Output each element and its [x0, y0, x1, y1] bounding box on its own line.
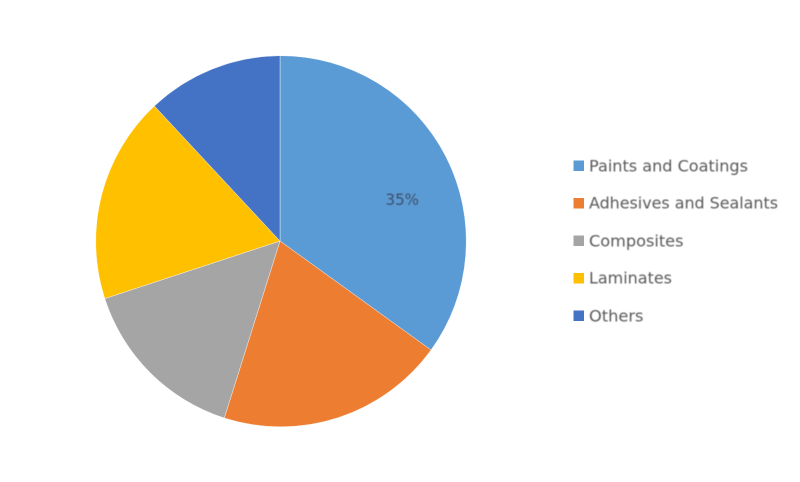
legend item: Others: Others: [589, 306, 644, 326]
legend item: Adhesives and Sealants: Adhesives and Sealants: [589, 194, 778, 212]
slice: Others: [154, 56, 280, 241]
legend: [574, 156, 778, 326]
slice: Laminates: [96, 106, 280, 299]
legend item: Laminates: Laminates: [589, 268, 672, 288]
slice: Composites: [105, 241, 280, 418]
slice: Adhesives and Sealants: [224, 241, 431, 427]
slice: Paints and Coatings 35%: [280, 56, 466, 350]
pie chart: [96, 56, 466, 427]
legend item: Paints and Coatings: Paints and Coatings: [589, 156, 748, 176]
legend item: Composites: Composites: [589, 232, 684, 250]
data label: 35%: 35%: [386, 190, 419, 209]
